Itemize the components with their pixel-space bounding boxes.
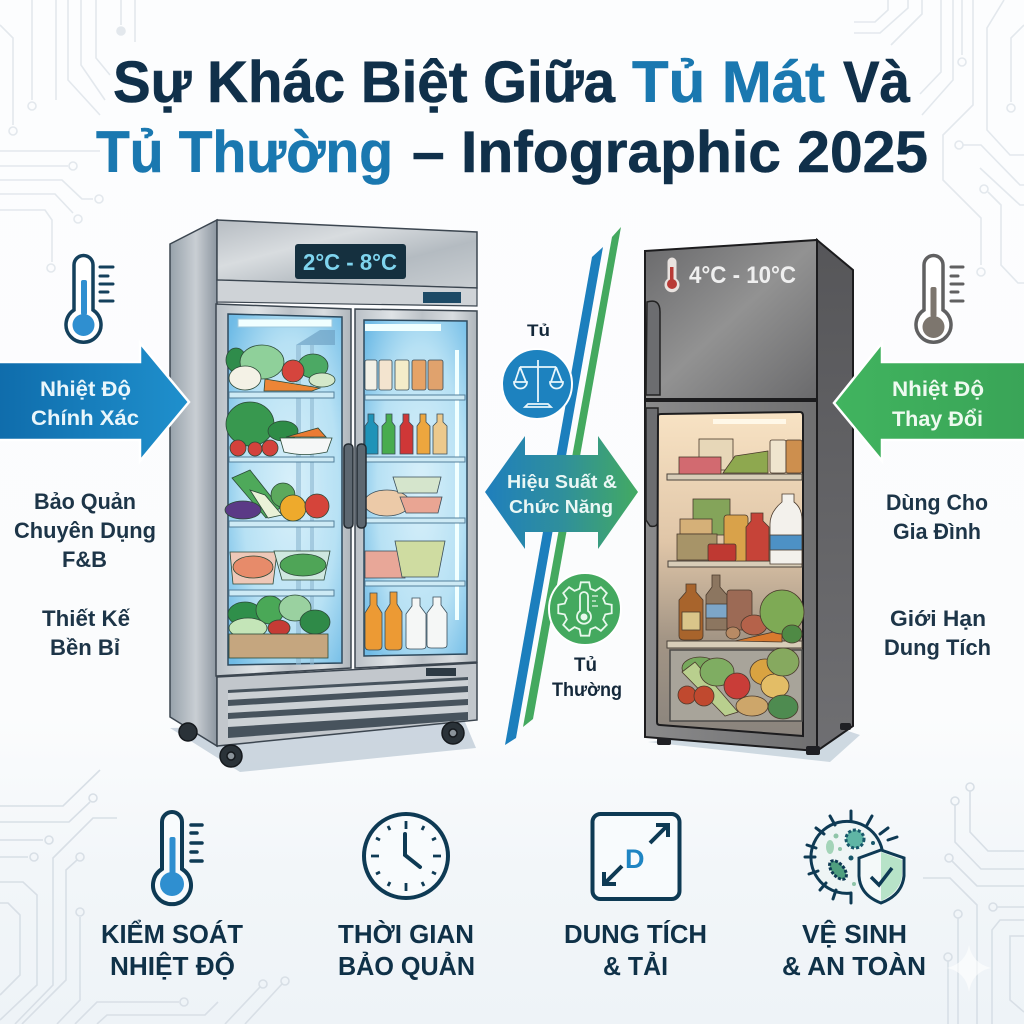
label: Tủ Thường: Tủ <box>574 655 597 676</box>
icon: left thermometer <box>66 256 113 342</box>
right text: Dùng Cho Gia Đình: Gia Đình <box>893 519 981 544</box>
icon: capacity square <box>592 814 680 899</box>
right text: Giới Hạn Dung Tích: Dung Tích <box>884 635 991 660</box>
label: Dung tích & tải: DUNG TÍCH <box>564 919 707 949</box>
left text: Thiết Kế Bền Bỉ <box>42 606 131 660</box>
diagonal divider green <box>523 227 621 727</box>
center arrow: Hiệu Suất & Chức Năng: Hiệu Suất & <box>507 471 617 492</box>
fridge upper door: 4°C - 10°C <box>689 262 796 289</box>
label: Dung tích & tải <box>564 919 707 981</box>
chiller top panel with display: 2°C - 8°C <box>303 249 397 275</box>
right text: Dùng Cho Gia Đình: Dùng Cho <box>886 490 988 515</box>
left text: Bảo Quản Chuyên Dụng F&B: Bảo Quản <box>34 489 136 514</box>
icon: capacity square: D <box>625 844 644 874</box>
fridge side panel <box>817 240 853 751</box>
label: Tủ Thường <box>552 655 622 701</box>
left text: Thiết Kế Bền Bỉ: Thiết Kế <box>42 606 131 631</box>
left text: Bảo Quản Chuyên Dụng F&B: F&B <box>62 547 107 572</box>
regular household fridge <box>645 240 860 762</box>
label: Kiểm soát nhiệt độ <box>101 919 243 981</box>
chiller door handles <box>344 444 366 528</box>
icon: thermometer bottom <box>153 812 202 904</box>
chiller top panel with display <box>217 220 477 306</box>
label: Vệ sinh & an toàn: & AN TOÀN <box>782 951 926 981</box>
left text: Bảo Quản Chuyên Dụng F&B: Chuyên Dụng <box>14 518 156 543</box>
icon: gear thermometer <box>549 573 621 645</box>
title: Tủ Thường <box>96 120 393 185</box>
right text: Giới Hạn Dung Tích <box>884 606 991 660</box>
fridge lower door <box>645 401 817 751</box>
left arrow: Nhiệt Độ Chính Xác: Nhiệt Độ <box>40 378 131 401</box>
drinks and food on right door <box>364 360 447 650</box>
label: Thời gian bảo quản: BẢO QUẢN <box>338 951 475 981</box>
left text: Thiết Kế Bền Bỉ: Bền Bỉ <box>50 635 120 660</box>
label: Vệ sinh & an toàn: VỆ SINH <box>802 919 907 949</box>
right arrow: Nhiệt Độ Thay Đổi <box>834 343 1024 461</box>
label: Kiểm soát nhiệt độ: KIỂM SOÁT <box>101 919 243 949</box>
chiller side panel <box>170 220 217 746</box>
title: Tủ Mát <box>632 50 825 115</box>
label: Vệ sinh & an toàn <box>782 919 926 981</box>
left text: Bảo Quản Chuyên Dụng F&B <box>14 489 156 572</box>
chiller base grille <box>217 663 477 746</box>
center arrow: Hiệu Suất & Chức Năng: Chức Năng <box>509 496 613 517</box>
title <box>96 50 928 185</box>
icon: bacteria and shield <box>805 811 904 903</box>
center arrow: Hiệu Suất & Chức Năng <box>485 436 638 549</box>
title: Và <box>843 50 911 115</box>
right text: Dùng Cho Gia Đình <box>886 490 988 544</box>
label: Thời gian bảo quản: THỜI GIAN <box>338 919 474 949</box>
right text: Giới Hạn Dung Tích: Giới Hạn <box>890 606 986 631</box>
label: Tủ: Tủ <box>527 321 550 340</box>
left arrow: Nhiệt Độ Chính Xác <box>0 343 189 461</box>
food on left door <box>225 345 335 658</box>
right arrow: Nhiệt Độ Thay Đổi: Nhiệt Độ <box>892 378 984 401</box>
label: Dung tích & tải: & TẢI <box>603 951 668 981</box>
left arrow: Nhiệt Độ Chính Xác: Chính Xác <box>31 407 139 430</box>
title: – Infographic 2025 <box>412 120 928 185</box>
fridge feet <box>657 723 851 755</box>
label: Kiểm soát nhiệt độ: NHIỆT ĐỘ <box>110 951 235 981</box>
label: Tủ Thường: Thường <box>552 680 622 701</box>
right arrow: Nhiệt Độ Thay Đổi: Thay Đổi <box>892 408 983 431</box>
fridge upper door <box>645 240 817 399</box>
food inside fridge <box>677 439 804 719</box>
icon: clock <box>364 814 448 898</box>
title: Sự Khác Biệt Giữa <box>113 50 616 115</box>
icon: right thermometer <box>916 256 963 342</box>
chiller right door <box>355 309 477 668</box>
label: Thời gian bảo quản <box>338 919 475 981</box>
chiller left door <box>216 304 351 676</box>
icon: balance scale <box>502 349 572 419</box>
sparkle mark <box>947 945 991 992</box>
chiller wheels <box>179 722 464 767</box>
diagonal divider blue <box>505 247 603 745</box>
commercial glass-door chiller <box>170 220 477 772</box>
